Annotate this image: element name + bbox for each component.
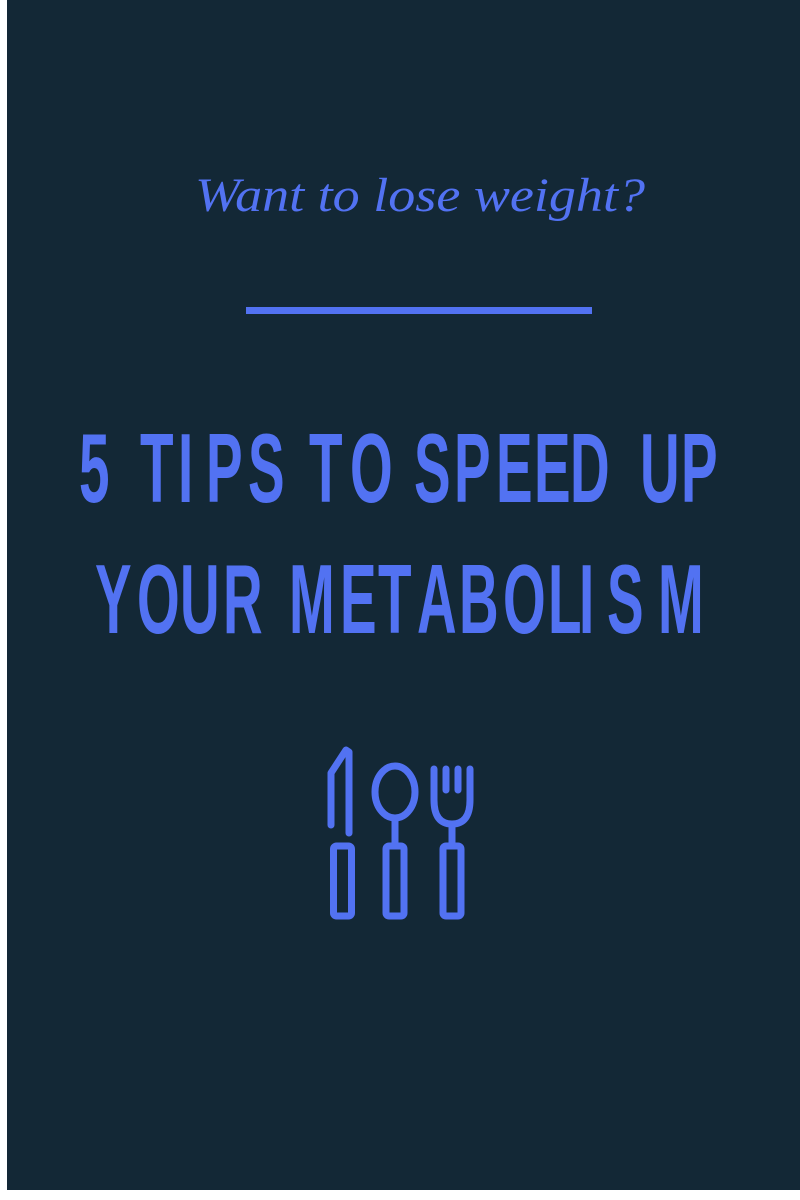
title: E	[340, 544, 377, 654]
spoon	[375, 766, 415, 916]
title: S	[248, 413, 285, 523]
title: S	[414, 413, 451, 523]
title: I	[579, 544, 594, 654]
divider line	[246, 307, 592, 314]
fork	[434, 769, 470, 916]
title: P	[206, 413, 243, 523]
knife	[331, 750, 352, 916]
subtitle: Want to lose weight?	[195, 169, 645, 222]
title: O	[503, 544, 546, 654]
title: E	[534, 413, 571, 523]
title: 5	[79, 413, 110, 523]
title: E	[496, 413, 533, 523]
title: M	[658, 544, 704, 654]
title	[79, 413, 718, 654]
title: U	[180, 544, 220, 654]
title: U	[640, 413, 680, 523]
title: S	[607, 544, 644, 654]
icon: cutlery	[331, 750, 470, 916]
title: L	[548, 544, 582, 654]
title: A	[417, 544, 457, 654]
title: T	[140, 413, 174, 523]
title: P	[681, 413, 718, 523]
title: R	[223, 544, 263, 654]
title: I	[178, 413, 193, 523]
title: P	[454, 413, 491, 523]
title: T	[309, 413, 343, 523]
title: O	[350, 413, 393, 523]
title: M	[289, 544, 335, 654]
title: O	[137, 544, 180, 654]
title: D	[570, 413, 610, 523]
title: Y	[95, 544, 132, 654]
title: B	[459, 544, 499, 654]
title: T	[378, 544, 412, 654]
